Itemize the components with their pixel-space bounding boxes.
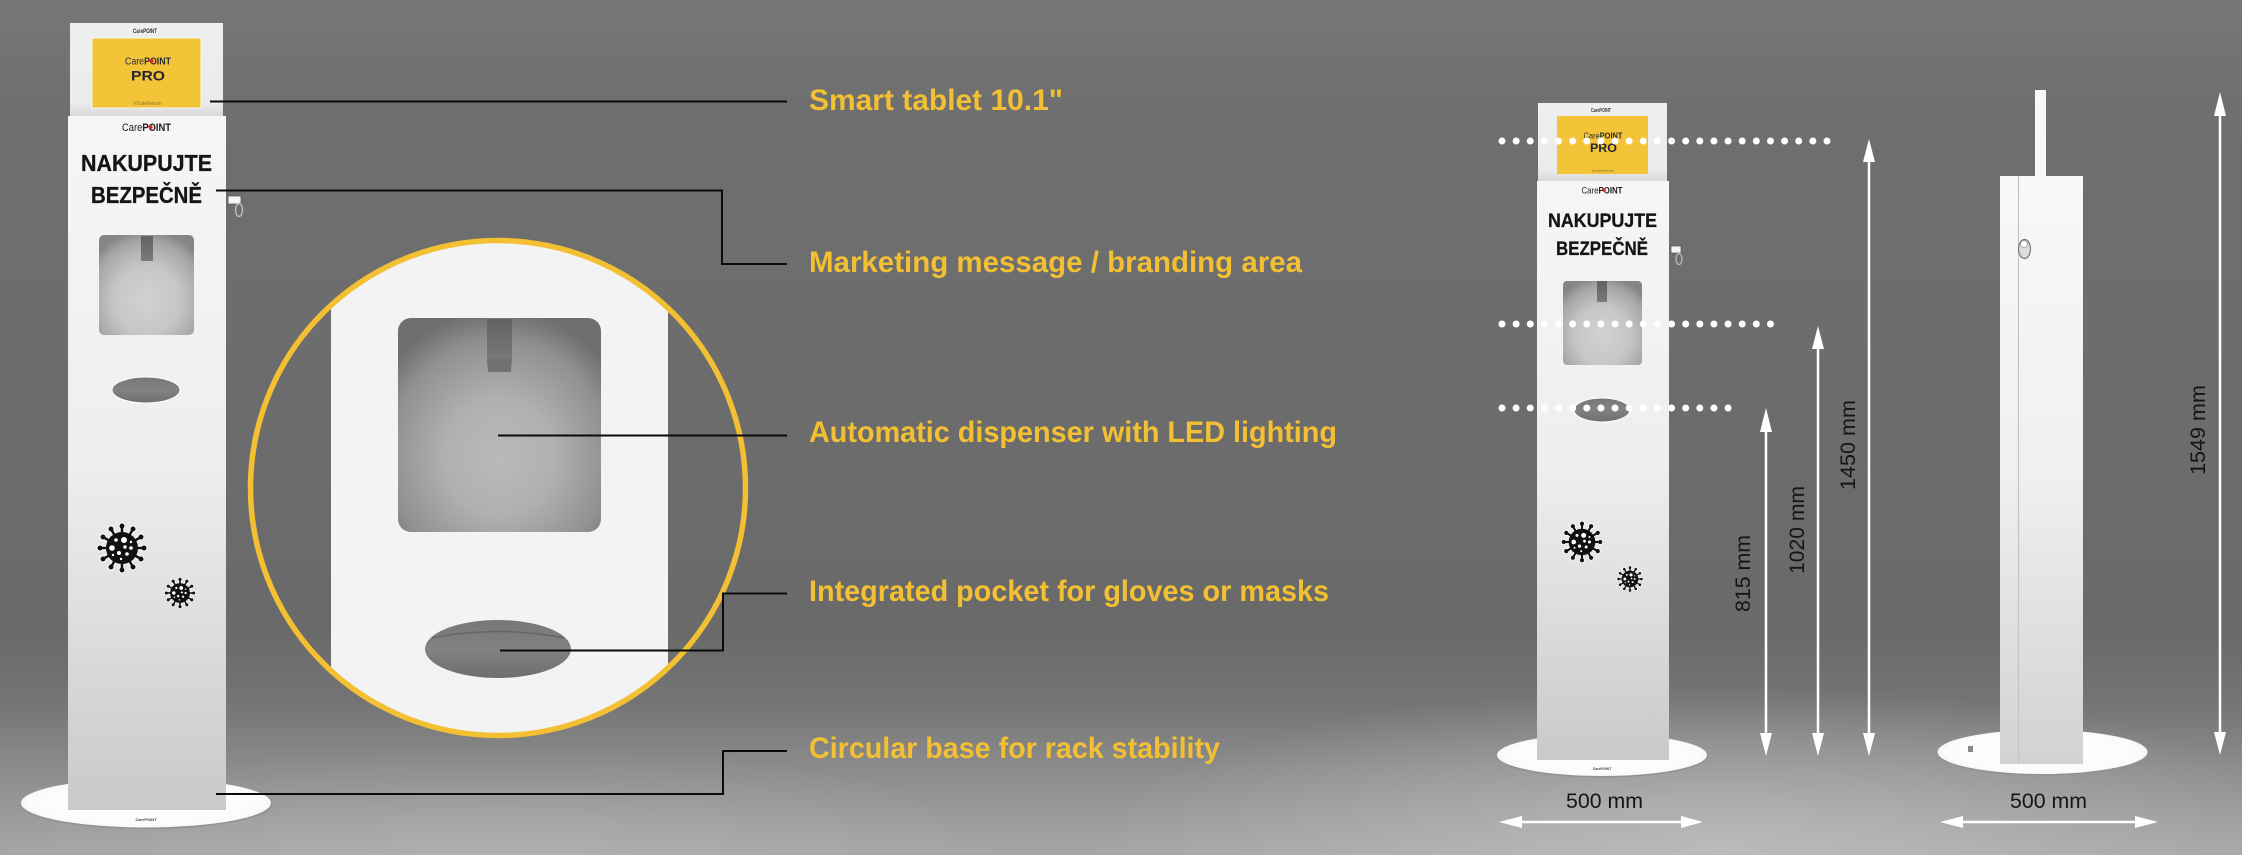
tablet housing: PRO [1590, 141, 1617, 155]
tablet housing [1538, 103, 1667, 181]
tablet housing: CarePOINT [1584, 130, 1623, 140]
pocket [112, 377, 180, 403]
dispenser window [99, 235, 194, 335]
callout labels: Smart tablet 10.1" [809, 84, 1063, 117]
dimension: 1549 mm [2187, 92, 2226, 755]
dimension: base width, front: 500 mm [1566, 790, 1643, 813]
base [1936, 730, 2148, 776]
1450 mm [1837, 139, 1875, 756]
1020 mm [1786, 326, 1824, 756]
tablet housing [70, 23, 223, 116]
tablet screen [92, 38, 201, 108]
lens ring [250, 240, 746, 736]
dimension: base width, side: 500 mm [2010, 790, 2087, 813]
marketing message: NAKUPUJTE [81, 150, 212, 176]
tablet housing: CarePOINT [1591, 108, 1611, 114]
callout labels: Automatic dispenser with LED lighting [809, 416, 1337, 449]
marketing message: BEZPEČNĚ [1556, 236, 1648, 260]
main body [68, 116, 226, 810]
dimension: base width, front [1499, 790, 1703, 828]
virus icons [98, 524, 195, 608]
body [1537, 181, 1669, 760]
lens pocket [425, 620, 571, 678]
body logo: CarePOINT [122, 122, 171, 134]
callout labels: Marketing message / branding area [809, 246, 1302, 279]
base [1496, 734, 1708, 778]
marketing message [81, 150, 212, 208]
callout labels: Integrated pocket for gloves or masks [809, 575, 1329, 608]
dimension: 1549 mm: 1549 mm [2187, 385, 2210, 475]
key [1671, 246, 1682, 264]
815 mm: 815 mm [1732, 535, 1755, 612]
dispenser window [1563, 281, 1642, 365]
tablet housing: CarePOINT [133, 29, 157, 35]
front kiosk (dimensioned) [1496, 103, 1708, 778]
dimension: base width, side [1940, 790, 2158, 828]
tablet housing: #SafeReturn [1592, 168, 1614, 173]
marketing message: NAKUPUJTE [1548, 210, 1657, 232]
marketing message [1548, 210, 1657, 260]
side view kiosk [1936, 90, 2148, 776]
tablet pole [2035, 90, 2046, 176]
circular base [20, 778, 272, 829]
dotted height guides [1502, 141, 1841, 408]
tablet screen: PRO [131, 68, 165, 84]
lens dispenser window [398, 318, 601, 532]
1450 mm: 1450 mm [1837, 400, 1860, 490]
circular base: CarePOINT [135, 817, 157, 822]
zoom lens [250, 238, 746, 738]
marketing message: BEZPEČNĚ [91, 181, 202, 208]
side body [2000, 176, 2083, 764]
lock and key ring [2018, 240, 2030, 258]
front kiosk (left, annotated) [20, 23, 272, 829]
key [228, 196, 242, 216]
lens panel [331, 238, 668, 738]
pocket [1574, 398, 1630, 422]
leader lines [210, 102, 787, 794]
tablet screen: CarePOINT [125, 56, 171, 68]
callout labels: Circular base for rack stability [809, 732, 1220, 765]
base: CarePOINT [1593, 767, 1612, 771]
tablet screen: #SafeReturn [134, 101, 162, 107]
body logo: CarePOINT [1582, 186, 1623, 196]
1020 mm: 1020 mm [1786, 486, 1809, 574]
815 mm [1732, 408, 1772, 756]
virus icons [1562, 522, 1643, 592]
callout labels [809, 84, 1337, 765]
dimension arrows: heights [1732, 139, 1875, 756]
